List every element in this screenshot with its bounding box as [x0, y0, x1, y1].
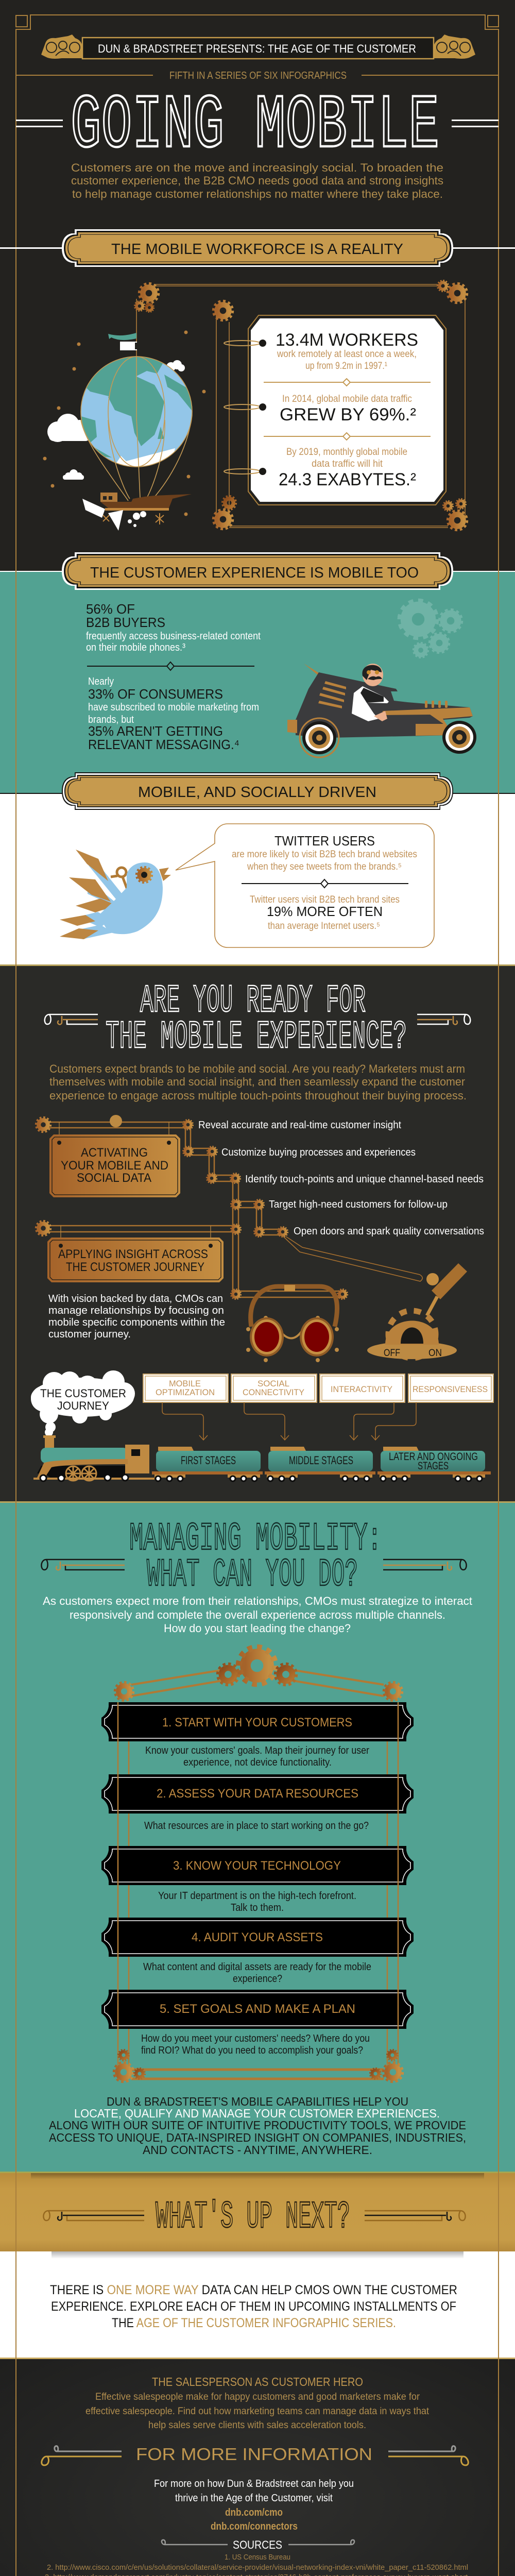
binder rings [224, 341, 260, 474]
step 2: What resources are in place to start working on the go? [144, 1820, 369, 1832]
journey boxes: CONNECTIVITY [243, 1387, 304, 1397]
stat: B2B buyers: 56% OF [86, 601, 135, 617]
capabilities statement [49, 2095, 466, 2157]
car 3: STAGES [418, 1460, 449, 1472]
sign: activating data: ACTIVATING [81, 1146, 148, 1160]
activation steps: Open doors and spark quality conversations [294, 1226, 484, 1237]
activation steps: Reveal accurate and real-time customer insight [198, 1120, 401, 1131]
section heading: socially driven [62, 772, 453, 810]
one more way statement: EXPERIENCE. EXPLORE EACH OF THEM IN UPCOMING INSTALLMENTS OF [51, 2299, 456, 2314]
sources heading: SOURCES [233, 2538, 282, 2551]
speech bubble [176, 824, 434, 947]
one more way statement [50, 2283, 457, 2330]
stat: exabytes [279, 447, 416, 489]
stat: consumers: 35% AREN'T GETTING [88, 723, 223, 739]
stat: consumers: have subscribed to mobile marketing from [88, 702, 259, 713]
vision paragraph: mobile specific components within the [48, 1317, 225, 1328]
car 3: LATER AND ONGOING [389, 1451, 478, 1463]
salesperson teaser: effective salespeople. Find out how marketing teams can manage data in ways that [85, 2406, 430, 2417]
rear support rods [129, 1702, 387, 2076]
stat: consumers: 33% OF CONSUMERS [88, 686, 223, 702]
activation steps [198, 1120, 484, 1237]
stat: workers: work remotely at least once a week, [277, 349, 417, 360]
banner title: DUN & BRADSTREET PRESENTS: THE AGE OF THE CUSTOMER [98, 42, 416, 55]
contact text: For more on how Dun & Bradstreet can help you [154, 2478, 354, 2489]
heading: managing mobility [41, 1517, 467, 1597]
journey boxes: OPTIMIZATION [156, 1387, 215, 1397]
section heading: socially driven: MOBILE, AND SOCIALLY DRIVEN [138, 784, 376, 801]
stat: exabytes: By 2019, monthly global mobile [286, 447, 407, 457]
managing paragraph: As customers expect more from their relationships, CMOs must strategize to interact [43, 1595, 472, 1607]
vision paragraph [48, 1293, 225, 1340]
step 2 [101, 1774, 414, 1832]
flag [108, 333, 137, 350]
section heading: mobile workforce: THE MOBILE WORKFORCE IS A REALITY [111, 241, 403, 258]
ready paragraph: Customers expect brands to be mobile and social. Are you ready? Marketers must arm [49, 1062, 465, 1075]
contact text: dnb.com/cmo [225, 2507, 283, 2518]
stat: traffic growth [280, 394, 416, 425]
hot air balloon [43, 331, 206, 531]
journey boxes: MOBILE [169, 1379, 201, 1388]
pipework gears [36, 1117, 347, 1299]
stat: B2B buyers [86, 601, 261, 653]
step 3 [101, 1846, 414, 1913]
intro text: to help manage customer relationships no matter where they take place. [72, 188, 443, 200]
sign: activating data [49, 1122, 180, 1197]
one more way statement: THE AGE OF THE CUSTOMER INFOGRAPHIC SERIES. [112, 2316, 396, 2330]
speech bubble: when they see tweets from the brands.⁵ [247, 861, 402, 872]
gear frame [135, 281, 467, 530]
step 1 [101, 1702, 414, 1768]
step 5: 5. SET GOALS AND MAKE A PLAN [160, 2002, 355, 2016]
flourish left [45, 1014, 98, 1024]
contact text: thrive in the Age of the Customer, visit [175, 2493, 333, 2504]
step 3: 3. KNOW YOUR TECHNOLOGY [173, 1859, 341, 1873]
stat: B2B buyers: frequently access business-related content [86, 631, 261, 642]
front support rods [118, 1702, 398, 2066]
stat: traffic growth: GREW BY 69%.² [280, 405, 416, 425]
step 3: Your IT department is on the high-tech forefront. [158, 1890, 356, 1902]
pipework: activating [36, 1115, 422, 1299]
beak [159, 868, 171, 881]
car 1 [152, 1447, 263, 1481]
capabilities statement: AND CONTACTS - ANYTIME, ANYWHERE. [143, 2143, 372, 2157]
one more way statement: THERE IS ONE MORE WAY DATA CAN HELP CMOS OWN THE CUSTOMER [50, 2283, 457, 2297]
step 4: 4. AUDIT YOUR ASSETS [192, 1930, 323, 1944]
step 5: How do you meet your customers' needs? Where do you [141, 2033, 370, 2044]
step 4: What content and digital assets are ready for the mobile [143, 1961, 371, 1973]
stat: workers: 13.4M WORKERS [276, 330, 418, 350]
gears [135, 281, 467, 530]
ready paragraph: experience to engage across multiple touch-points throughout their buying process. [49, 1089, 467, 1102]
stat: traffic growth: In 2014, global mobile data traffic [282, 394, 412, 404]
contact text [154, 2478, 354, 2532]
flourish right [417, 1014, 470, 1024]
journey boxes: SOCIAL [258, 1379, 289, 1388]
step 1: 1. START WITH YOUR CUSTOMERS [162, 1716, 352, 1730]
sign: activating data: SOCIAL DATA [77, 1171, 151, 1185]
sources heading [162, 2538, 354, 2551]
stat: B2B buyers: on their mobile phones.³ [86, 642, 185, 653]
clouds [47, 360, 185, 480]
salesperson teaser: help sales serve clients with sales acceleration tools. [148, 2420, 366, 2431]
sign: applying insight: APPLYING INSIGHT ACROSS [58, 1247, 208, 1261]
globe [81, 357, 192, 467]
car and driver [287, 664, 476, 757]
heading: what's up next [43, 2196, 466, 2239]
eye gear [136, 867, 152, 883]
banner box [82, 38, 434, 59]
step 4: experience? [233, 1973, 282, 1985]
journey boxes: RESPONSIVENESS [413, 1384, 488, 1394]
capabilities statement: DUN & BRADSTREET'S MOBILE CAPABILITIES HELP YOU [107, 2095, 408, 2108]
capabilities statement: ALONG WITH OUR SUITE OF INTUITIVE PRODUCTIVITY TOOLS, WE PROVIDE [49, 2119, 466, 2132]
contact text: dnb.com/connectors [211, 2521, 298, 2532]
steam cloud [31, 1370, 135, 1436]
header banner [41, 35, 475, 59]
step 4 [101, 1918, 414, 1985]
feathers [77, 860, 126, 939]
vision paragraph: With vision backed by data, CMOs can [48, 1293, 223, 1304]
step 1: experience, not device functionality. [183, 1757, 332, 1768]
intro text [71, 161, 443, 200]
flourish right [383, 1560, 467, 1570]
step 5 [101, 1990, 414, 2056]
section heading: mobile workforce [0, 229, 515, 267]
sources list: 2. http://www.cisco.com/c/en/us/solutions/collateral/service-provider/visual-networking-index-vni/white_paper_c11-520862.html [47, 2563, 468, 2572]
intro text: customer experience, the B2B CMO needs good data and strong insights [71, 174, 443, 187]
car 2 [265, 1447, 375, 1481]
lever switch: OFF [384, 1348, 400, 1359]
heading: for more information: FOR MORE INFORMATION [136, 2445, 372, 2464]
lever switch: ON [428, 1348, 442, 1359]
capabilities statement: LOCATE, QUALIFY AND MANAGE YOUR CUSTOMER EXPERIENCES. [74, 2107, 440, 2120]
stat: consumers [88, 676, 259, 752]
driver [352, 664, 389, 721]
journey boxes [143, 1374, 493, 1402]
section heading: customer experience: THE CUSTOMER EXPERIENCE IS MOBILE TOO [90, 565, 419, 581]
sign: applying insight [47, 1226, 224, 1282]
steam cloud: JOURNEY [57, 1399, 109, 1412]
speech bubble: 19% MORE OFTEN [267, 904, 383, 919]
activation steps: Customize buying processes and experiences [221, 1147, 416, 1158]
stats card [224, 315, 446, 505]
stat: exabytes: 24.3 EXABYTES.² [279, 470, 416, 489]
sources list: 1. US Census Bureau [225, 2553, 290, 2562]
wind-up key [111, 868, 127, 889]
steam train [33, 1435, 491, 1481]
clockwork bird [60, 850, 171, 939]
flourish left [41, 1560, 125, 1570]
banner ornament left [41, 35, 82, 59]
stat: workers: up from 9.2m in 1997.¹ [305, 361, 387, 371]
sign: applying insight: THE CUSTOMER JOURNEY [66, 1260, 204, 1274]
activation steps: Target high-need customers for follow-up [269, 1199, 448, 1210]
sources list [45, 2553, 470, 2576]
ready paragraph [49, 1062, 467, 1102]
heading: managing mobility: WHAT CAN YOU DO? [147, 1553, 358, 1597]
title rules [16, 120, 499, 127]
flourish right [365, 2211, 466, 2221]
flourish left [43, 2211, 144, 2221]
series line: FIFTH IN A SERIES OF SIX INFOGRAPHICS [169, 70, 347, 81]
car 2: MIDDLE STAGES [289, 1454, 353, 1467]
stat: workers [276, 330, 418, 371]
pale gears [400, 601, 461, 657]
speech bubble: TWITTER USERS [274, 833, 375, 849]
wheels [300, 718, 476, 757]
steps gear crown [115, 1648, 402, 1700]
stars [43, 331, 206, 516]
stat: consumers: brands, but [88, 714, 134, 725]
banner ornament right [434, 35, 475, 59]
heading: for more information [42, 2445, 468, 2465]
speech bubble: than average Internet users.⁵ [268, 921, 380, 931]
flourish right [388, 2446, 468, 2465]
activation steps: Identify touch-points and unique channel-based needs [245, 1174, 484, 1185]
steam cloud: THE CUSTOMER [40, 1387, 126, 1400]
stat: consumers: RELEVANT MESSAGING.⁴ [88, 737, 239, 752]
vision paragraph: manage relationships by focusing on [48, 1305, 224, 1316]
managing paragraph: responsively and complete the overall experience across multiple channels. [70, 1608, 445, 1621]
salesperson teaser [85, 2375, 430, 2431]
step 3: Talk to them. [231, 1902, 284, 1913]
heading: are you ready [45, 979, 470, 1059]
lever switch [367, 1263, 467, 1359]
managing paragraph [43, 1595, 472, 1635]
locomotive [33, 1435, 154, 1481]
section heading: customer experience [62, 552, 453, 590]
intro text: Customers are on the move and increasingly social. To broaden the [71, 161, 443, 174]
salesperson teaser: THE SALESPERSON AS CUSTOMER HERO [152, 2375, 363, 2388]
capabilities statement: ACCESS TO UNIQUE, DATA-INSPIRED INSIGHT ON COMPANIES, INDUSTRIES, [49, 2131, 466, 2144]
stat: exabytes: data traffic will hit [312, 459, 383, 469]
stat: B2B buyers: B2B BUYERS [86, 615, 165, 630]
goggles [246, 1285, 339, 1362]
managing paragraph: How do you start leading the change? [164, 1622, 351, 1635]
journey arrows [162, 1402, 416, 1440]
step 1: Know your customers' goals. Map their journey for user [145, 1745, 369, 1756]
ship [82, 493, 192, 531]
vision paragraph: customer journey. [48, 1329, 131, 1340]
heading: what's up next: WHAT'S UP NEXT? [156, 2196, 350, 2239]
step 5: find ROI? What do you need to accomplish your goals? [141, 2045, 363, 2056]
journey boxes: INTERACTIVITY [331, 1384, 392, 1394]
step 2: 2. ASSESS YOUR DATA RESOURCES [157, 1787, 358, 1801]
speech bubble: Twitter users visit B2B tech brand sites [250, 894, 400, 905]
sign: activating data: YOUR MOBILE AND [61, 1159, 168, 1173]
salesperson teaser: Effective salespeople make for happy customers and good marketers make for [95, 2392, 420, 2402]
speech bubble: are more likely to visit B2B tech brand websites [232, 849, 417, 860]
flourish left [42, 2446, 122, 2465]
balloon ribs and cables [81, 357, 192, 501]
ready paragraph: themselves with mobile and social insight, and then seamlessly expand the customer [49, 1075, 465, 1088]
bird body [98, 862, 163, 934]
car 1: FIRST STAGES [181, 1454, 236, 1467]
steps gear base [114, 2050, 402, 2081]
stat: consumers: Nearly [88, 676, 114, 687]
car 3 [377, 1447, 491, 1481]
